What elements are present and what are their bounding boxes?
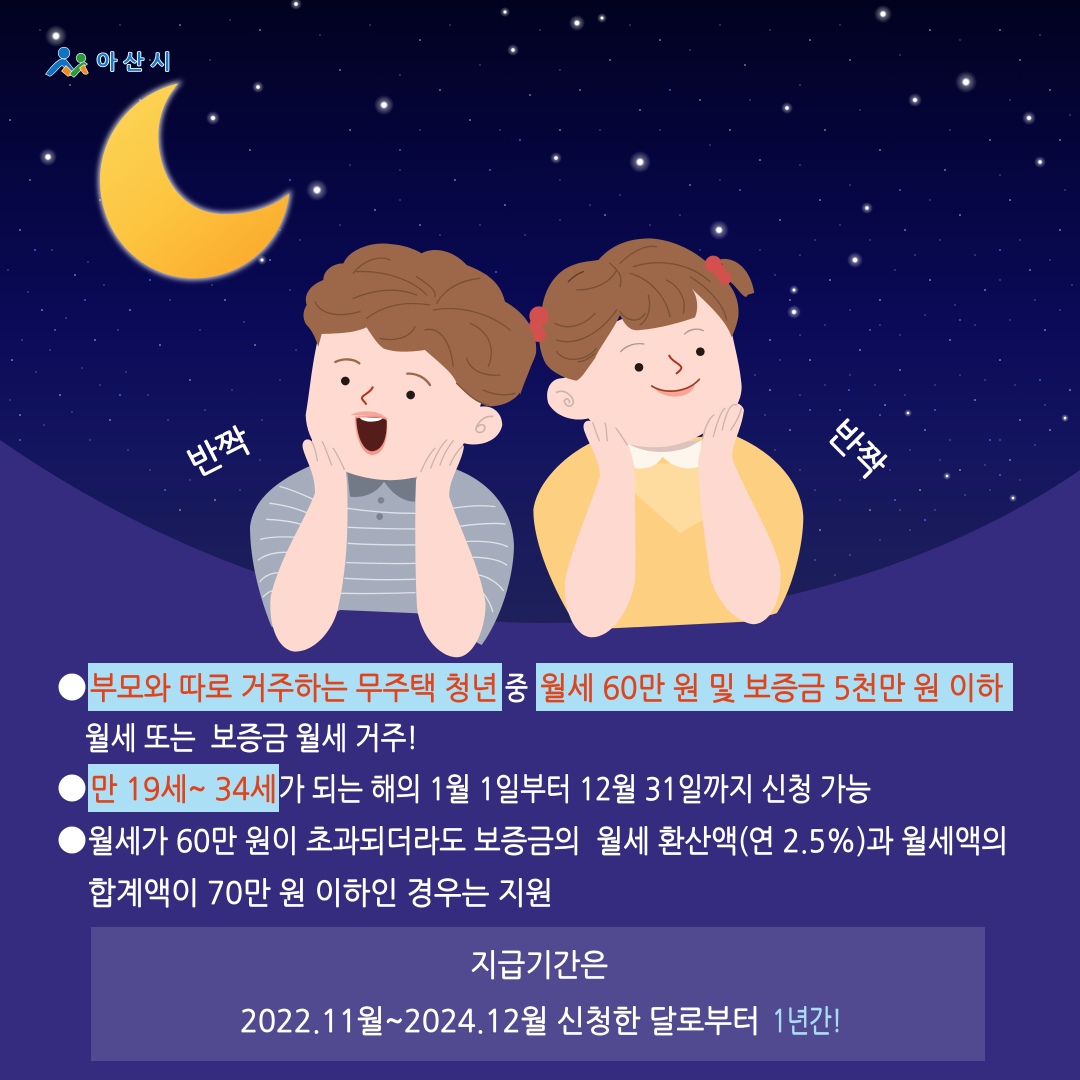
highlighted text 2: 월세 60만 원 및 보증금 5천만 원 이하 [540,673,1003,704]
payment period panel [91,927,985,1061]
girl character [520,238,803,637]
bullet 3 [58,826,1008,909]
line two: 합계액이 70만 원 이하인 경우는 지원 [88,878,553,909]
boy finger lines [312,440,463,472]
panel emphasis: 1년간! [772,1006,842,1037]
bullet dot [58,674,86,700]
tiny star field [8,20,1072,575]
girl dress [533,435,803,628]
girl collar [627,440,702,469]
panel body: 2022.11월~2024.12월 신청한 달로부터 [240,1006,760,1037]
logo wordmark: 아 산 시 [96,52,171,72]
logo: Asan city [46,48,171,77]
bright stars [39,0,1069,502]
highlight 1 [88,663,502,711]
sparkle word left: 반짝 [183,422,255,481]
line one: 월세가 60만 원이 초과되더라도 보증금의 월세 환산액(연 2.5%)과 월세액의 [88,826,1008,857]
sparkle word right: 반짝 [822,414,892,484]
highlight 2 [536,663,1013,711]
continuation line: 월세 또는 보증금 월세 거주! [85,723,418,754]
girl eyes [635,347,705,372]
girl hair ties [529,256,732,342]
girl brows [621,329,703,352]
connector word: 중 [505,673,528,704]
highlight [88,764,279,812]
boy ear swirl [476,416,493,433]
crescent moon [100,83,289,278]
girl left arm and hand [565,415,635,637]
info section [58,663,1013,909]
panel background [91,927,985,1061]
boy character [250,244,536,657]
boy left arm and hand [270,435,348,652]
boy nose [362,387,373,404]
highlighted text 1: 부모와 따로 거주하는 무주택 청년 [90,673,498,704]
boy shirt [250,463,514,645]
boy face [306,297,502,480]
logo mark [46,48,88,77]
boy right arm and hand [415,438,486,657]
purple hill [0,440,1080,1080]
bullet dot [58,774,86,802]
boy hair [304,244,536,406]
girl hair [539,238,739,381]
girl mouth [652,379,699,397]
bullet 2 [58,764,871,812]
bullet dot [58,826,86,854]
boy eyes [341,377,415,399]
girl face [547,287,742,447]
bullet 1 [58,663,1013,754]
boy hair edge behind ties [520,317,535,395]
boy buttons [376,497,384,520]
girl ear swirl [556,391,573,406]
boy mouth [351,411,387,455]
girl right arm and hand [698,403,781,624]
girl pigtail right [720,259,754,297]
highlighted age text: 만 19세~ 34세 [90,774,277,805]
boy collar [347,472,417,502]
girl dress yoke [633,463,704,533]
boy hair strands [315,258,515,405]
girl finger lines [593,405,741,445]
age description: 가 되는 해의 1월 1일부터 12월 31일까지 신청 가능 [279,774,871,805]
panel heading: 지급기간은 [470,950,608,981]
boy brows [335,359,430,385]
boy shirt stripes [258,487,507,612]
girl hair strands [555,246,727,362]
girl nose [669,356,681,373]
